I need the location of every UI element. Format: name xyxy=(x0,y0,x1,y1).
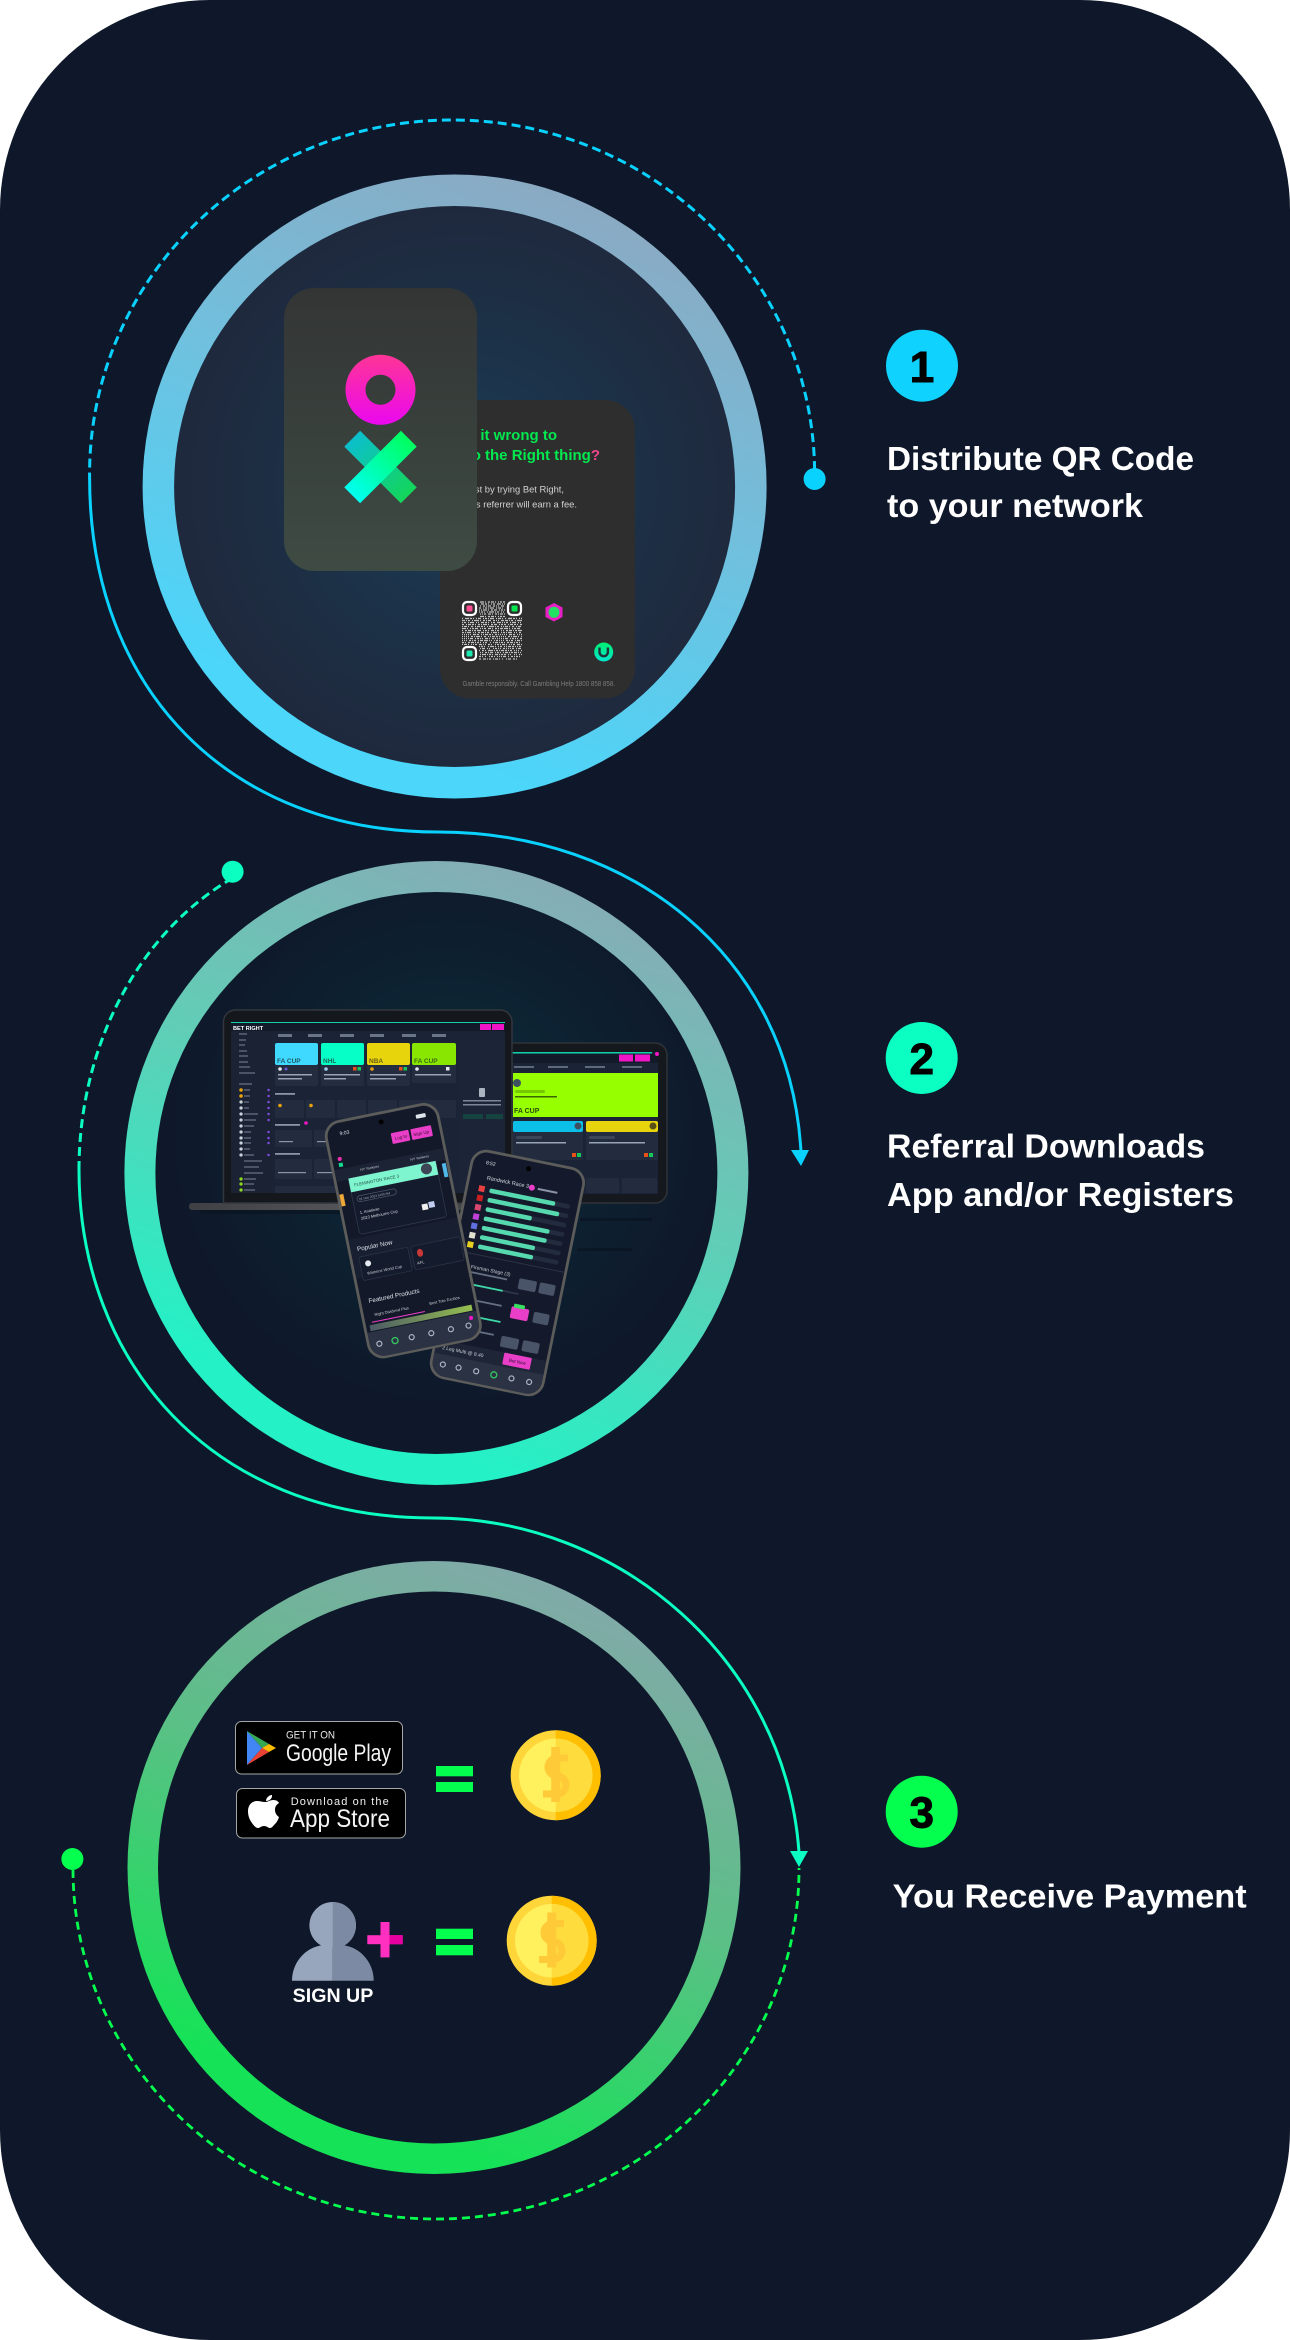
App Store badge: Download on the xyxy=(291,1796,389,1808)
icon: hexagon badge xyxy=(546,603,562,622)
step 1 badge xyxy=(886,330,958,402)
step 3 heading: You Receive Payment xyxy=(893,1878,1247,1915)
laptop ticker xyxy=(278,1034,446,1037)
login buttons xyxy=(391,1125,433,1144)
card: QR flyer back xyxy=(440,400,635,698)
Google Play badge: Google Play xyxy=(286,1740,391,1767)
panel: step 2 ring xyxy=(124,861,748,1485)
equals sign bottom xyxy=(436,1929,473,1955)
card: logo front xyxy=(284,288,477,571)
phone nav bar xyxy=(430,1353,543,1396)
laptop FA Cup card: FA CUP xyxy=(277,1058,301,1065)
featured products: Featured Products xyxy=(368,1288,420,1305)
phone ticker row xyxy=(334,1148,446,1182)
tablet hero card xyxy=(513,1073,658,1117)
phone ticker row: NY Yankees xyxy=(410,1154,430,1162)
race card side tabs xyxy=(337,1163,450,1206)
featured products: Right Dividend Plus xyxy=(374,1305,409,1317)
icon: apple xyxy=(248,1795,279,1828)
race card: 01 Nov 2023 1400 AM xyxy=(359,1191,391,1201)
step 2 heading: App and/or Registers xyxy=(887,1176,1234,1213)
race runners list xyxy=(437,1249,565,1356)
bet bar: 2 Leg Multi @ 8.40 xyxy=(442,1345,484,1359)
laptop FA Cup card xyxy=(275,1043,318,1086)
login buttons: Sign Up xyxy=(413,1129,430,1137)
step 2 badge: 2 xyxy=(909,1035,934,1084)
path: dashed blue arc to step 1 xyxy=(90,120,815,478)
flyer headline xyxy=(461,427,600,464)
login buttons: Log In xyxy=(394,1134,408,1141)
icon: coin bottom xyxy=(507,1896,597,1986)
tablet NHL card xyxy=(513,1121,583,1160)
QR finder: pink xyxy=(460,600,479,617)
flyer headline: Do the Right thing? xyxy=(461,447,600,464)
laptop NBA card xyxy=(367,1043,410,1086)
laptop right panel xyxy=(458,1040,505,1193)
logo X xyxy=(344,431,417,503)
popular now heading: Popular Now xyxy=(356,1239,394,1253)
icon: Google Play triangle xyxy=(247,1731,276,1765)
path: solid teal S curve with arrow xyxy=(79,1170,808,1867)
dot: step 1 path start xyxy=(804,468,826,490)
App Store badge xyxy=(236,1788,406,1838)
phone small logo xyxy=(337,1157,343,1167)
panel: step 1 ring xyxy=(143,174,767,798)
step 1 badge: 1 xyxy=(910,343,934,392)
step 1 heading: to your network xyxy=(887,487,1144,524)
step 2 badge xyxy=(886,1022,958,1094)
device: laptop xyxy=(189,1010,549,1210)
step 2 heading: Referral Downloads xyxy=(887,1128,1205,1165)
label: sign up: SIGN UP xyxy=(293,1986,374,2007)
step 1 heading: Distribute QR Code xyxy=(887,440,1194,477)
laptop NHL card xyxy=(321,1043,364,1086)
QR finder: teal xyxy=(460,645,479,662)
race card: 1. Anatinae xyxy=(359,1206,381,1215)
step 1 heading xyxy=(887,440,1194,524)
step 2 heading xyxy=(887,1128,1234,1213)
featured products: Best Tote Exotica xyxy=(429,1295,461,1306)
popular now cards: AFL xyxy=(417,1259,425,1266)
horse bars xyxy=(467,1185,570,1265)
device: phone left xyxy=(324,1102,483,1360)
laptop FA Cup card 2 xyxy=(412,1043,456,1083)
icon: coin top xyxy=(511,1730,601,1820)
race card: FLEMINGTON RACE 3 xyxy=(354,1173,400,1188)
tablet hero card: FA CUP xyxy=(514,1108,540,1115)
popular now background band xyxy=(349,1218,465,1279)
race card xyxy=(348,1161,447,1234)
equals sign top xyxy=(436,1766,473,1792)
tablet small cards xyxy=(586,1178,657,1193)
popular now cards xyxy=(359,1237,464,1281)
laptop header: BET RIGHT xyxy=(233,1026,264,1032)
laptop Popular Now xyxy=(275,1093,456,1118)
laptop Upcoming Racing xyxy=(275,1121,351,1147)
laptop FA Cup card 2: FA CUP xyxy=(414,1058,438,1065)
laptop NHL card: NHL xyxy=(323,1058,336,1065)
flyer footer text: Gamble responsibly. Call Gambling Help 1800 858 858. xyxy=(462,679,615,688)
phone status and header: 8:52 xyxy=(485,1160,496,1168)
featured products xyxy=(364,1278,473,1331)
QR finder: green xyxy=(505,600,524,617)
Google Play badge xyxy=(236,1722,402,1774)
flyer body copy xyxy=(465,484,577,510)
phone ticker row: NY Yankees xyxy=(360,1164,380,1172)
popular now cards: Womens World Cup xyxy=(367,1264,403,1276)
logo O xyxy=(346,355,416,425)
laptop sidebar xyxy=(231,1031,272,1193)
Google Play badge: GET IT ON xyxy=(286,1730,335,1742)
App Store badge: App Store xyxy=(290,1805,390,1833)
tablet NBA card xyxy=(586,1121,658,1160)
bet bar xyxy=(435,1339,546,1375)
dot: step 2 path start xyxy=(222,861,244,883)
phone status bar: 9:03 xyxy=(339,1129,350,1137)
dot: step 3 path start xyxy=(61,1848,83,1870)
path: solid blue S curve with arrow xyxy=(90,478,809,1166)
icon: magenta plus xyxy=(367,1922,403,1957)
phone nav bar xyxy=(367,1311,481,1358)
icon: U badge xyxy=(594,642,613,662)
laptop NBA card: NBA xyxy=(369,1058,383,1065)
flyer body copy: Test by trying Bet Right, xyxy=(465,484,564,494)
laptop Upcoming Sport xyxy=(275,1153,351,1193)
flyer body copy: Its referrer will earn a fee. xyxy=(471,498,577,510)
flyer headline: Is it wrong to xyxy=(464,427,557,444)
race runners list: Fireman Stage (3) xyxy=(470,1264,511,1278)
phone status and header: Randwick Race 3 xyxy=(486,1176,529,1190)
panel: step 3 ring xyxy=(128,1561,740,2174)
device: phone right xyxy=(429,1148,586,1398)
laptop header xyxy=(231,1023,505,1032)
path: dashed teal arc to step 2 xyxy=(79,878,233,1170)
devices: shadows xyxy=(200,1210,652,1251)
step 3 badge xyxy=(886,1776,958,1848)
icon: person sign up xyxy=(292,1902,374,1981)
path: dashed green arc to step 3 xyxy=(73,1868,799,2219)
phone status and header xyxy=(482,1158,561,1196)
step 3 badge: 3 xyxy=(909,1789,934,1838)
device: tablet xyxy=(490,1043,667,1203)
bet bar: Bet Now xyxy=(509,1358,527,1366)
QR code xyxy=(460,600,524,662)
phone status bar xyxy=(339,1111,427,1137)
tablet ticker xyxy=(514,1066,642,1068)
race card: 2023 Melbourne Cup xyxy=(360,1208,399,1221)
